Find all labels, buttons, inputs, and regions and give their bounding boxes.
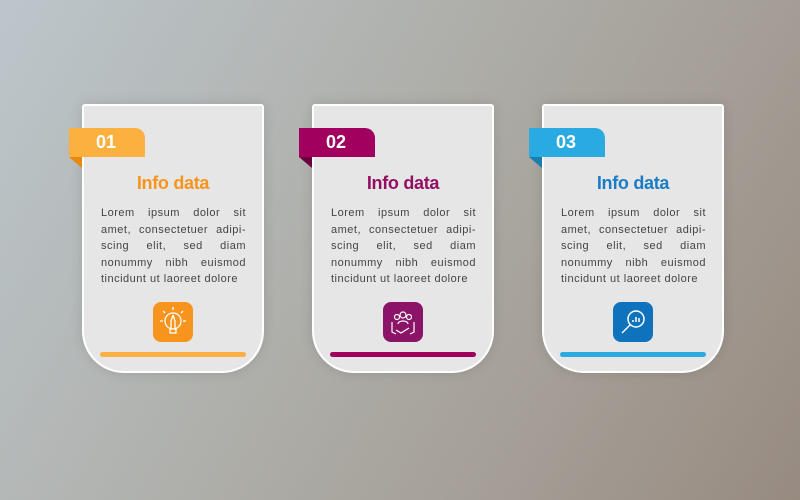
text 2: amet, consectetuer adipi- xyxy=(331,224,476,236)
card 2 xyxy=(312,104,494,373)
text 2: Lorem ipsum dolor sit xyxy=(331,207,476,219)
icon: team handshake xyxy=(383,302,423,342)
heading 1: Info data xyxy=(137,173,209,193)
text 3: Lorem ipsum dolor sit xyxy=(561,207,706,219)
icon: search chart xyxy=(613,302,653,342)
heading 2: Info data xyxy=(367,173,439,193)
text 3: nonummy nibh euismod xyxy=(561,257,706,269)
text 1: tincidunt ut laoreet dolore xyxy=(101,273,238,285)
tab fold xyxy=(299,157,312,168)
tab 03: 03 xyxy=(556,132,576,152)
card 3 xyxy=(542,104,724,373)
text 1: nonummy nibh euismod xyxy=(101,257,246,269)
text 1 xyxy=(101,207,246,285)
tab fold xyxy=(69,157,82,168)
icon: lightbulb xyxy=(153,302,193,342)
text 3: scing elit, sed diam xyxy=(561,240,706,252)
text 1: Lorem ipsum dolor sit xyxy=(101,207,246,219)
bar 2 xyxy=(330,352,476,357)
text 1: scing elit, sed diam xyxy=(101,240,246,252)
bar 1 xyxy=(100,352,246,357)
text 2 xyxy=(331,207,476,285)
text 2: scing elit, sed diam xyxy=(331,240,476,252)
heading 3: Info data xyxy=(597,173,669,193)
tab 01: 01 xyxy=(96,132,116,152)
tab 02 xyxy=(299,128,375,157)
card 1 xyxy=(82,104,264,373)
tab 01 xyxy=(69,128,145,157)
tab 02: 02 xyxy=(326,132,346,152)
text 2: nonummy nibh euismod xyxy=(331,257,476,269)
text 1: amet, consectetuer adipi- xyxy=(101,224,246,236)
text 2: tincidunt ut laoreet dolore xyxy=(331,273,468,285)
text 3: tincidunt ut laoreet dolore xyxy=(561,273,698,285)
bar 3 xyxy=(560,352,706,357)
text 3: amet, consectetuer adipi- xyxy=(561,224,706,236)
tab fold xyxy=(529,157,542,168)
tab 03 xyxy=(529,128,605,157)
text 3 xyxy=(561,207,706,285)
